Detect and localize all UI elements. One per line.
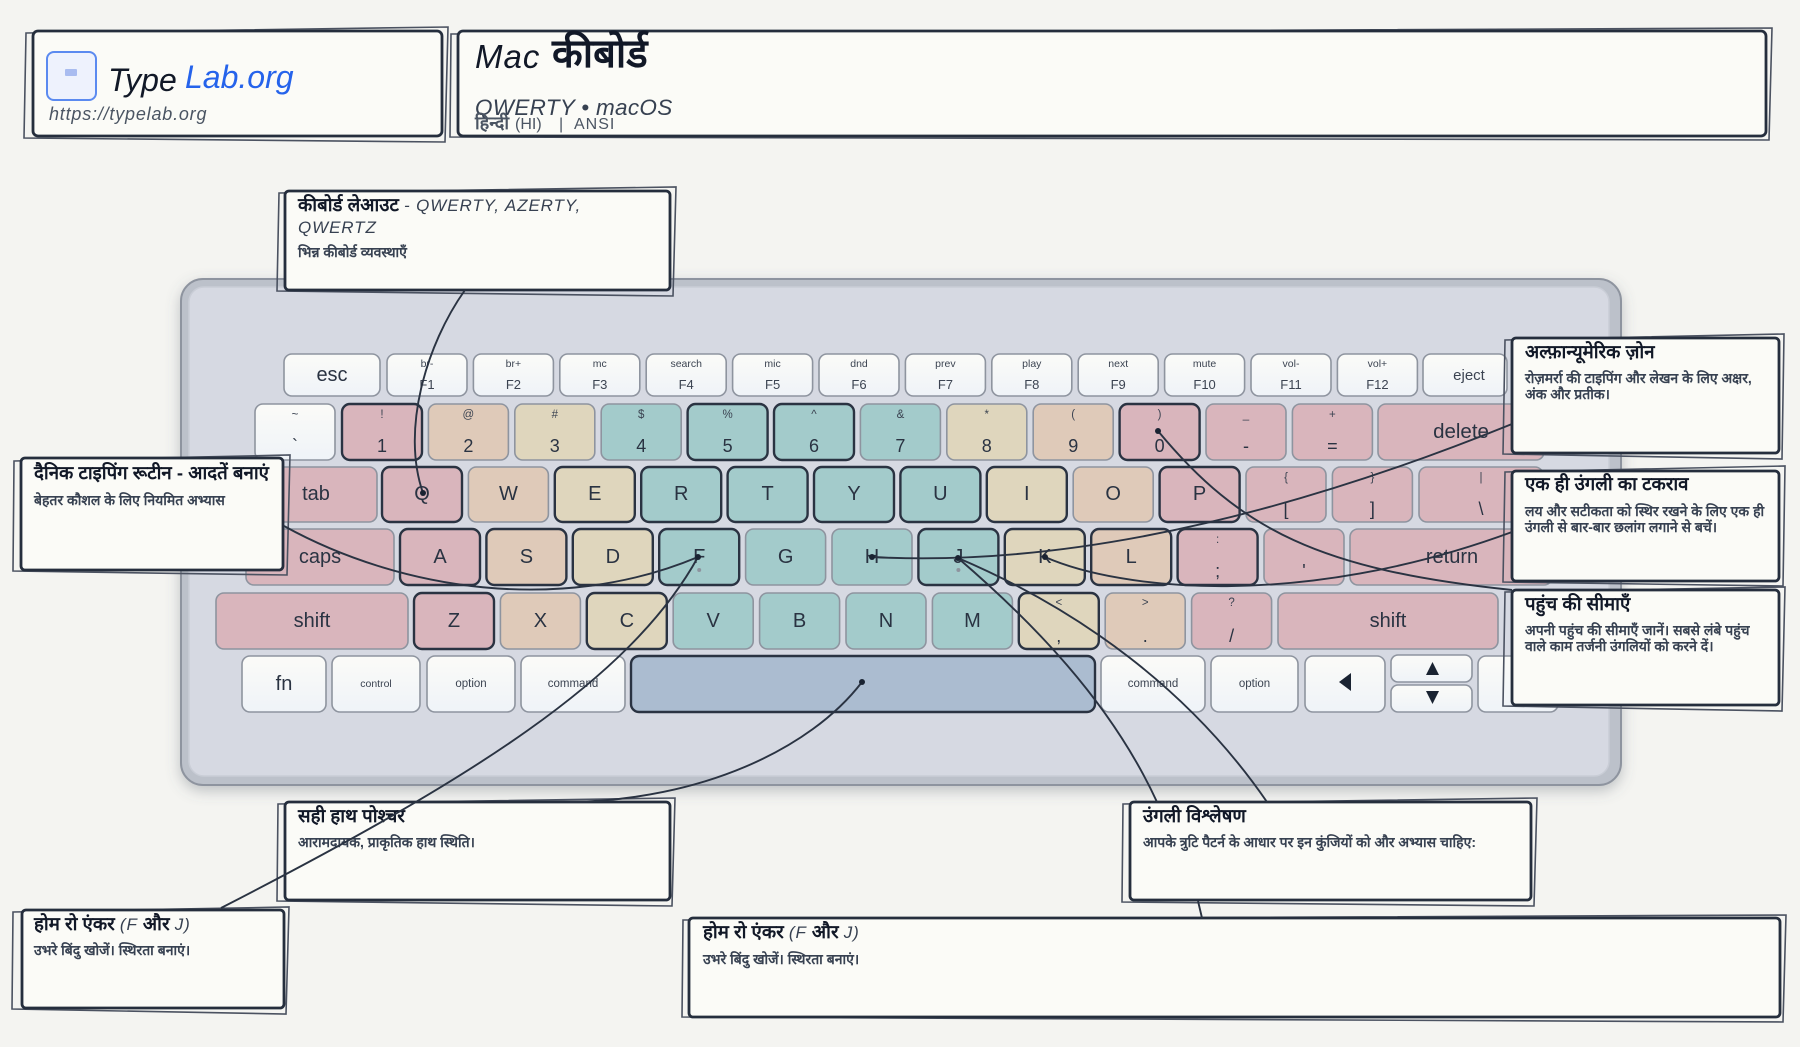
QWERTY key row: U	[933, 483, 948, 505]
QWERTY key row: |	[1480, 472, 1482, 484]
callout description: अपनी पहुंच की सीमाएँ जानें। सबसे लंबे पहुंच	[1525, 622, 1750, 638]
shift key row	[216, 593, 1498, 649]
home key row: L	[1126, 546, 1137, 568]
home key row: J	[953, 546, 963, 568]
QWERTY key row: I	[1024, 483, 1030, 505]
panel: title	[450, 28, 1772, 140]
function key row: next	[1108, 358, 1128, 370]
panel: daily routine callout	[13, 455, 290, 575]
logo wordmark: Type	[108, 62, 177, 98]
callout heading: दैनिक टाइपिंग रूटीन - आदतें बनाएं	[33, 461, 270, 483]
home key row: G	[778, 546, 793, 568]
shift key row: N	[879, 610, 893, 632]
QWERTY key row: Y	[847, 483, 861, 505]
callout heading: होम रो एंकर (F और J)	[702, 920, 860, 942]
function key row: F7	[938, 377, 953, 392]
callout description: बेहतर कौशल के लिए नियमित अभ्यास	[33, 492, 225, 508]
panel: keyboard layout callout	[277, 187, 676, 296]
callout description: उंगली से बार-बार छलांग लगाने से बचें।	[1524, 519, 1717, 535]
number key row: 7	[895, 436, 905, 456]
number key row: *	[985, 409, 990, 421]
bottom key row: command	[1128, 678, 1178, 690]
shift key row: ?	[1228, 597, 1235, 609]
function key row: play	[1022, 358, 1042, 370]
number key row: $	[638, 409, 645, 421]
panel: reach limits callout	[1503, 587, 1785, 711]
QWERTY key row	[255, 467, 1543, 522]
number key row: 5	[723, 436, 733, 456]
shift key row: .	[1143, 626, 1148, 646]
QWERTY key row: [	[1283, 499, 1289, 519]
shift key row: /	[1229, 626, 1234, 646]
bottom key row: command	[548, 678, 598, 690]
home key row: A	[433, 546, 447, 568]
bottom key row: option	[1239, 678, 1270, 690]
home key row: '	[1302, 561, 1306, 581]
shift key row: >	[1142, 597, 1149, 609]
home key row: ;	[1215, 561, 1220, 581]
shift key row: ,	[1056, 626, 1061, 646]
shift key row: X	[534, 610, 547, 632]
panel: finger analysis callout	[1122, 798, 1537, 906]
callout heading: एक ही उंगली का टकराव	[1524, 472, 1689, 494]
number key row: delete	[1433, 420, 1489, 443]
QWERTY key row: }	[1370, 472, 1374, 484]
shift key row: M	[964, 610, 981, 632]
panel: keyboard	[181, 279, 1621, 785]
shift key row: <	[1055, 597, 1062, 609]
number key row: +	[1329, 409, 1336, 421]
number key row: 6	[809, 436, 819, 456]
callout description: उभरे बिंदु खोजें। स्थिरता बनाएं।	[33, 942, 190, 960]
callout heading: होम रो एंकर (F और J)	[33, 912, 191, 934]
panel: alphanumeric zone callout	[1503, 334, 1784, 459]
function key row: F9	[1111, 377, 1126, 392]
home key row: F	[693, 546, 705, 568]
callout description: लय और सटीकता को स्थिर रखने के लिए एक ही	[1525, 503, 1764, 519]
panel: same finger callout	[1503, 466, 1785, 586]
number key row: =	[1327, 436, 1338, 456]
function key row: eject	[1453, 367, 1486, 384]
QWERTY key row: P	[1193, 483, 1206, 505]
number key row: !	[380, 409, 384, 421]
logo url: https://typelab.org	[49, 104, 207, 124]
number key row: 9	[1068, 436, 1078, 456]
number key row: 3	[550, 436, 560, 456]
home key row: return	[1426, 546, 1478, 568]
title: Mac	[475, 38, 540, 75]
bottom key row	[242, 655, 1558, 712]
function key row: F10	[1193, 377, 1216, 392]
language line: (HI)	[515, 116, 542, 133]
callout description: अंक और प्रतीक।	[1525, 386, 1610, 402]
callout heading: सही हाथ पोश्चर	[297, 804, 406, 826]
function key row: F3	[592, 377, 607, 392]
function key row: F12	[1366, 377, 1389, 392]
function key row: F5	[765, 377, 780, 392]
callout description: भिन्न कीबोर्ड व्यवस्थाएँ	[297, 244, 408, 260]
function key row: mc	[593, 358, 607, 370]
number key row: ^	[811, 409, 817, 421]
number key row: )	[1158, 409, 1162, 421]
shift key row: B	[793, 610, 806, 632]
number key row: @	[463, 409, 474, 421]
callout description: वाले काम तर्जनी उंगलियों को करने दें।	[1524, 638, 1714, 654]
panel: logo	[24, 27, 448, 142]
QWERTY key row: Q	[414, 483, 430, 505]
home key row: K	[1038, 546, 1052, 568]
number key row: -	[1243, 436, 1249, 456]
number key row: ~	[292, 409, 299, 421]
keyboard chassis	[181, 279, 1621, 785]
QWERTY key row: E	[588, 483, 601, 505]
function key row: F8	[1024, 377, 1039, 392]
callout description: रोज़मर्रा की टाइपिंग और लेखन के लिए अक्षर,	[1525, 370, 1752, 386]
function key row: dnd	[850, 358, 868, 370]
number key row: %	[722, 409, 733, 421]
QWERTY key row: \	[1478, 499, 1484, 519]
QWERTY key row: O	[1105, 483, 1121, 505]
number key row	[255, 404, 1544, 460]
function key row: esc	[316, 364, 348, 386]
QWERTY key row: {	[1284, 472, 1288, 484]
connector lines	[221, 290, 1512, 918]
QWERTY key row: R	[674, 483, 688, 505]
function key row: F11	[1280, 377, 1302, 392]
callout heading: उंगली विश्लेषण	[1142, 804, 1247, 826]
callout description: आरामदायक, प्राकृतिक हाथ स्थिति।	[298, 834, 475, 852]
number key row: 2	[463, 436, 473, 456]
number key row: `	[292, 436, 298, 456]
number key row: 8	[982, 436, 992, 456]
QWERTY key row: W	[499, 483, 518, 505]
callout description: उभरे बिंदु खोजें। स्थिरता बनाएं।	[702, 951, 859, 969]
home key row: D	[606, 546, 620, 568]
shift key row: Z	[448, 610, 460, 632]
bottom key row: fn	[276, 673, 292, 695]
home key row: :	[1216, 534, 1219, 546]
QWERTY key row: ]	[1370, 499, 1375, 519]
function key row: prev	[935, 358, 956, 370]
shift key row: shift	[294, 610, 331, 632]
function key row: F4	[679, 377, 694, 392]
number key row: #	[552, 409, 559, 421]
QWERTY key row: tab	[302, 483, 330, 505]
panel: hand posture callout	[277, 798, 675, 906]
QWERTY key row: T	[761, 483, 774, 505]
function key row	[284, 354, 1507, 396]
language line: ANSI	[574, 116, 615, 133]
callout description: आपके त्रुटि पैटर्न के आधार पर इन कुंजियों को और अभ्यास चाहिए:	[1143, 834, 1476, 852]
callout heading continuation: QWERTZ	[298, 218, 377, 237]
callout heading: अल्फ़ान्यूमेरिक ज़ोन	[1525, 340, 1655, 364]
home key row: H	[865, 546, 879, 568]
home key row: caps	[299, 546, 341, 568]
function key row: search	[670, 358, 702, 370]
number key row: (	[1071, 409, 1075, 421]
callout heading: पहुंच की सीमाएँ	[1524, 592, 1631, 617]
bottom key row: option	[455, 678, 487, 690]
function key row: F1	[419, 377, 435, 392]
title: कीबोर्ड	[551, 30, 650, 76]
function key row: br+	[506, 358, 521, 370]
home key row	[246, 529, 1552, 585]
function key row: vol+	[1368, 358, 1387, 370]
number key row: _	[1242, 409, 1250, 421]
shift key row: C	[620, 610, 634, 632]
function key row: vol-	[1283, 358, 1300, 370]
function key row: mic	[764, 358, 781, 370]
panel: home row anchor callout left	[12, 907, 289, 1014]
number key row: &	[897, 409, 905, 421]
function key row: F2	[506, 377, 521, 392]
shift key row: V	[707, 610, 721, 632]
function key row: F6	[851, 377, 867, 392]
logo wordmark accent: Lab.org	[185, 59, 294, 95]
callout heading: कीबोर्ड लेआउट - QWERTY, AZERTY,	[297, 193, 581, 215]
language line: हिन्दी	[474, 112, 510, 133]
language line: |	[559, 116, 563, 133]
number key row: 4	[636, 436, 646, 456]
bottom key row: control	[360, 678, 392, 690]
icon: keyboard logo	[47, 52, 96, 100]
number key row: 1	[377, 436, 387, 456]
function key row: br-	[421, 358, 434, 370]
function key row: mute	[1193, 358, 1216, 370]
subtitle: QWERTY • macOS	[475, 95, 673, 120]
number key row: 0	[1155, 436, 1165, 456]
shift key row: shift	[1370, 610, 1407, 632]
home key row: S	[520, 546, 533, 568]
panel: home row anchor callout bottom	[682, 915, 1786, 1022]
